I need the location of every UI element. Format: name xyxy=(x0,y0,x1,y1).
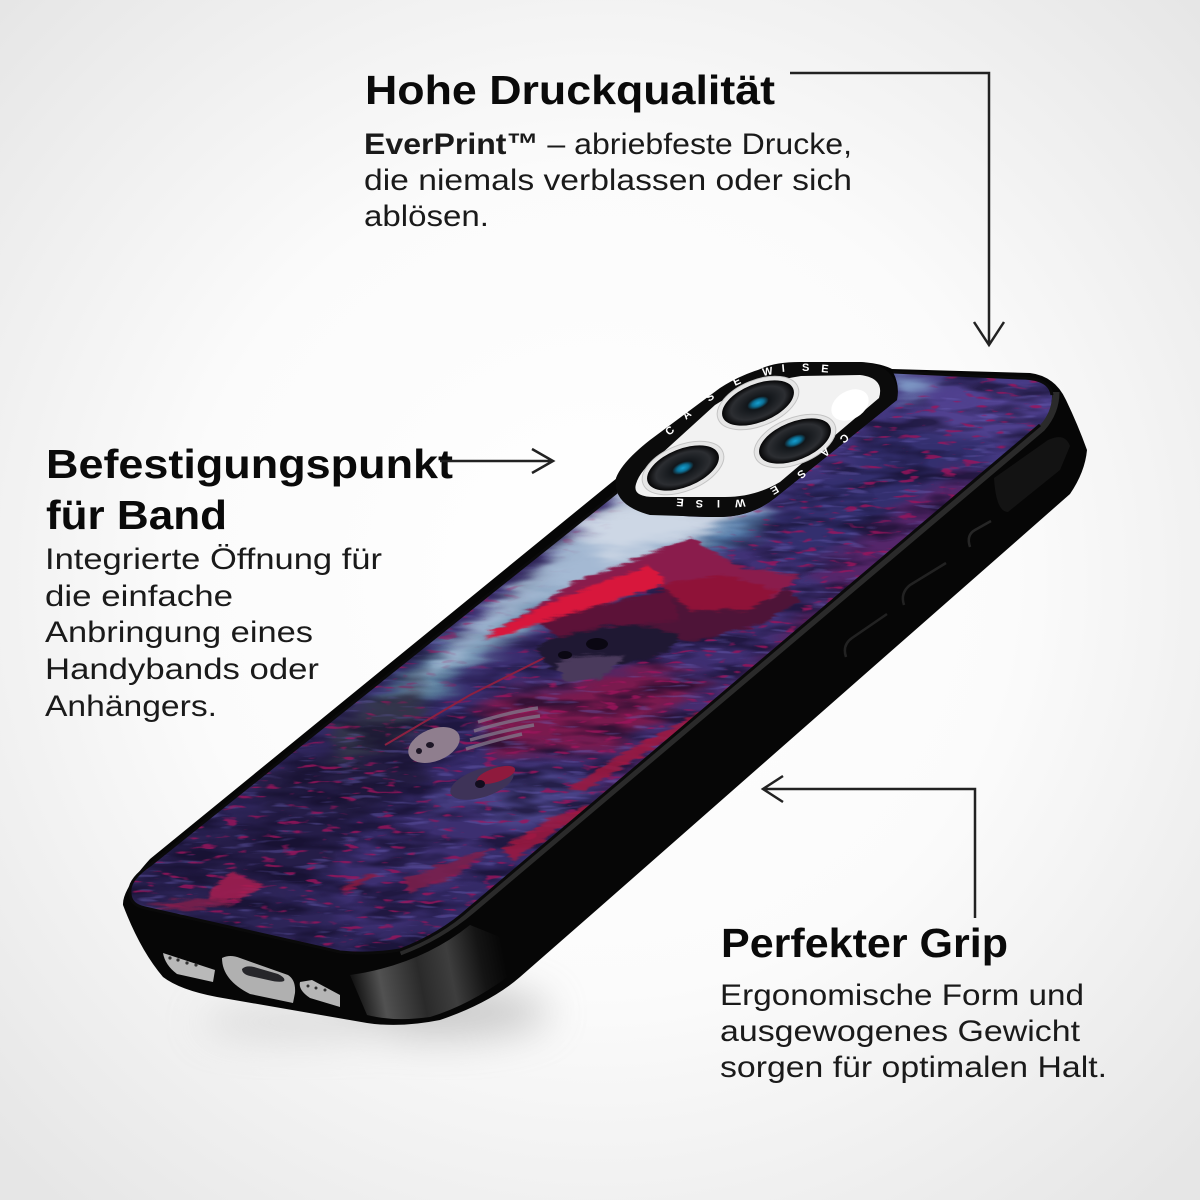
skull eye sockets xyxy=(558,638,608,659)
phone drop shadow xyxy=(200,986,550,1038)
flash xyxy=(826,383,874,427)
heading: grip: Perfekter Grip xyxy=(721,920,1008,966)
strap mount recess xyxy=(994,437,1070,512)
body: strap attachment: Anhängers. xyxy=(45,690,217,723)
fallen skull one xyxy=(408,727,460,763)
callout: strap attachment xyxy=(45,441,453,723)
lens top xyxy=(710,366,806,440)
case body silhouette xyxy=(123,362,1087,1025)
action button xyxy=(969,521,991,547)
crimson petal flecks xyxy=(132,376,1050,952)
case artwork: skeleton under a red umbrella xyxy=(130,374,1052,952)
crimson brush strokes xyxy=(146,711,700,912)
umbrella pole xyxy=(384,656,546,746)
CASEWISE ring lettering lower: CASEWISE xyxy=(676,431,851,509)
body: grip: ausgewogenes Gewicht xyxy=(720,1015,1081,1048)
large skull in hat xyxy=(537,626,680,682)
body: print quality xyxy=(364,128,852,233)
arrow: grip xyxy=(763,776,975,918)
red umbrella xyxy=(483,537,800,640)
body: grip xyxy=(720,979,1107,1084)
charging port xyxy=(222,956,295,1003)
body: strap attachment: die einfache xyxy=(45,580,233,613)
painted colour masses xyxy=(150,372,1050,930)
heading: strap attachment xyxy=(46,441,453,538)
glossy corner highlight xyxy=(350,925,520,1019)
volume up button xyxy=(903,563,946,605)
phone with case xyxy=(100,350,1100,1025)
heading: print quality: Hohe Druckqualität xyxy=(365,67,775,113)
callout: print quality xyxy=(364,67,852,233)
body: strap attachment: Anbringung eines xyxy=(45,616,313,649)
rib cage xyxy=(466,708,540,749)
pale blue-violet strokes xyxy=(134,386,1052,950)
CASEWISE ring lettering upper: CASEWISE xyxy=(663,362,829,438)
artwork outline xyxy=(130,372,1052,953)
dark mottled paint texture xyxy=(131,376,1052,952)
body: strap attachment xyxy=(45,543,382,723)
body: grip: Ergonomische Form und xyxy=(720,979,1084,1012)
fallen skull two xyxy=(450,766,516,800)
left speaker grille xyxy=(163,953,215,982)
lens right xyxy=(747,404,843,478)
body: print quality: die niemals verblassen oder sich xyxy=(364,164,852,197)
body: grip: sorgen für optimalen Halt. xyxy=(720,1051,1107,1084)
volume down button xyxy=(845,614,887,657)
right speaker grille xyxy=(300,980,340,1007)
artwork base colour xyxy=(131,374,1052,952)
arrow: strap attachment xyxy=(440,449,553,473)
camera island xyxy=(635,375,880,497)
side edge ridge xyxy=(400,392,1056,952)
body: strap attachment: Integrierte Öffnung für xyxy=(45,543,382,576)
heading: strap attachment: Befestigungspunkt xyxy=(46,441,453,487)
camera bump frame xyxy=(616,362,897,517)
body: print quality: ablösen. xyxy=(364,200,489,233)
lens left xyxy=(635,431,731,505)
callout: grip xyxy=(720,920,1107,1084)
body: strap attachment: Handybands oder xyxy=(45,653,319,686)
arrow: print quality xyxy=(790,73,1004,345)
heading: strap attachment: für Band xyxy=(46,492,227,538)
body: print quality: EverPrint™ – abriebfeste Drucke, xyxy=(364,128,852,161)
